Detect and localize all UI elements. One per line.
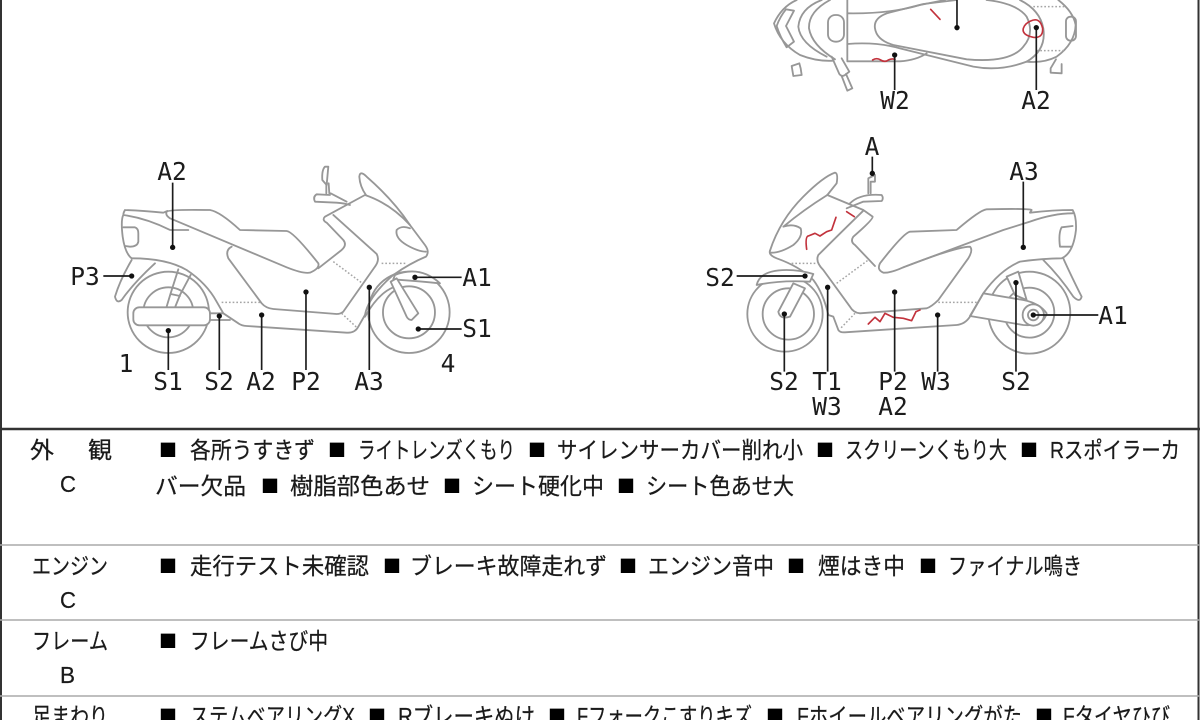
leader lines and dots: left side: [103, 183, 462, 370]
diagram: scooter left side view: [103, 167, 462, 370]
labels: right side view: A: [865, 132, 880, 161]
labels: right side view: P2: [878, 367, 908, 396]
table row: engine grade C: C: [60, 587, 76, 613]
table row: exterior grade C: サイレンサーカバー削れ小: [557, 437, 803, 463]
table row: exterior grade C: 外: [30, 437, 54, 463]
table row: exterior grade C: 各所うすきず: [190, 437, 315, 463]
table row: exterior grade C: ■: [617, 473, 635, 499]
labels: right side view: S2: [769, 367, 799, 396]
diagram: scooter right side view: [737, 157, 1098, 372]
table row: exterior grade C: シート硬化中: [472, 473, 604, 499]
leader lines and dots: top view: [892, 0, 1039, 90]
labels: top view: A2: [1021, 86, 1051, 115]
labels: left side view: S2: [204, 367, 234, 396]
table row: exterior grade C: Rスポイラーカ: [1050, 437, 1180, 463]
table row: exterior grade C: シート色あせ大: [646, 473, 794, 499]
table row: exterior grade C: ■: [261, 473, 279, 499]
table row: engine grade C: ■: [619, 553, 637, 579]
table row: frame grade B: フレーム: [32, 628, 108, 654]
table row: frame grade B: B: [60, 662, 75, 688]
labels: left side view: S1: [153, 367, 183, 396]
table row: engine grade C: エンジン: [32, 553, 108, 579]
labels: top view: W2: [880, 86, 910, 115]
labels: left side view: P3: [70, 262, 100, 291]
table row: exterior grade C: ■: [816, 437, 834, 463]
labels: right side view: A3: [1009, 157, 1039, 186]
diagram: scooter top view: [774, 0, 1076, 91]
table row: engine grade C: 走行テスト未確認: [190, 553, 369, 579]
labels: right side view: [705, 132, 1128, 421]
labels: left side view: S1: [462, 314, 492, 343]
table row: frame grade B: ■: [159, 628, 177, 654]
table row: engine grade C: ファイナル鳴き: [948, 553, 1082, 579]
table row: engine grade C: [32, 553, 1082, 613]
table row: exterior grade C: ■: [328, 437, 346, 463]
labels: left side view: [70, 157, 492, 396]
left side outline: [115, 167, 450, 353]
table row: exterior grade C: ■: [528, 437, 546, 463]
labels: right side view: W3: [921, 367, 951, 396]
labels: left side view: A3: [354, 367, 384, 396]
labels: left side view: A2: [246, 367, 276, 396]
table row: engine grade C: 煙はき中: [818, 553, 905, 579]
table row: engine grade C: ブレーキ故障走れず: [410, 553, 607, 579]
labels: left side view: 4: [441, 349, 455, 378]
right side outline: [747, 173, 1082, 354]
table row: exterior grade C: C: [60, 471, 76, 497]
table row: exterior grade C: ライトレンズくもり: [358, 437, 515, 463]
scooter top view outline: [774, 0, 1076, 91]
labels: left side view: P2: [291, 367, 321, 396]
red damage marks on top view: [873, 9, 1043, 61]
labels: right side view: S2: [1001, 367, 1031, 396]
table row: exterior grade C: 樹脂部色あせ: [290, 473, 430, 499]
labels: left side view: 1: [119, 349, 133, 378]
labels: right side view: A1: [1098, 301, 1128, 330]
table row: frame grade B: [32, 628, 328, 688]
table row: exterior grade C: ■: [1020, 437, 1038, 463]
labels: right side view: A2: [878, 392, 908, 421]
labels: left side view: A1: [462, 263, 492, 292]
table row: engine grade C: エンジン音中: [648, 553, 774, 579]
table row: exterior grade C: 観: [88, 437, 112, 463]
table row: exterior grade C: ■: [443, 473, 461, 499]
table row: engine grade C: ■: [919, 553, 937, 579]
table row: exterior grade C: ■: [159, 437, 177, 463]
labels: top view: [880, 86, 1051, 115]
table row: suspension, clipped at page bottom: [32, 703, 1170, 720]
labels: left side view: A2: [157, 157, 187, 186]
table row: exterior grade C: [30, 437, 1180, 499]
table row: frame grade B: フレームさび中: [190, 628, 328, 654]
leader lines and dots: right side: [737, 157, 1098, 372]
red damage marks on right side: [806, 212, 920, 324]
table row: exterior grade C: バー欠品: [155, 473, 246, 499]
table row: exterior grade C: スクリーンくもり大: [845, 437, 1007, 463]
table row: engine grade C: ■: [787, 553, 805, 579]
labels: right side view: T1: [812, 367, 842, 396]
table row: engine grade C: ■: [159, 553, 177, 579]
labels: right side view: W3: [812, 392, 842, 421]
table row: engine grade C: ■: [383, 553, 401, 579]
labels: right side view: S2: [705, 263, 735, 292]
